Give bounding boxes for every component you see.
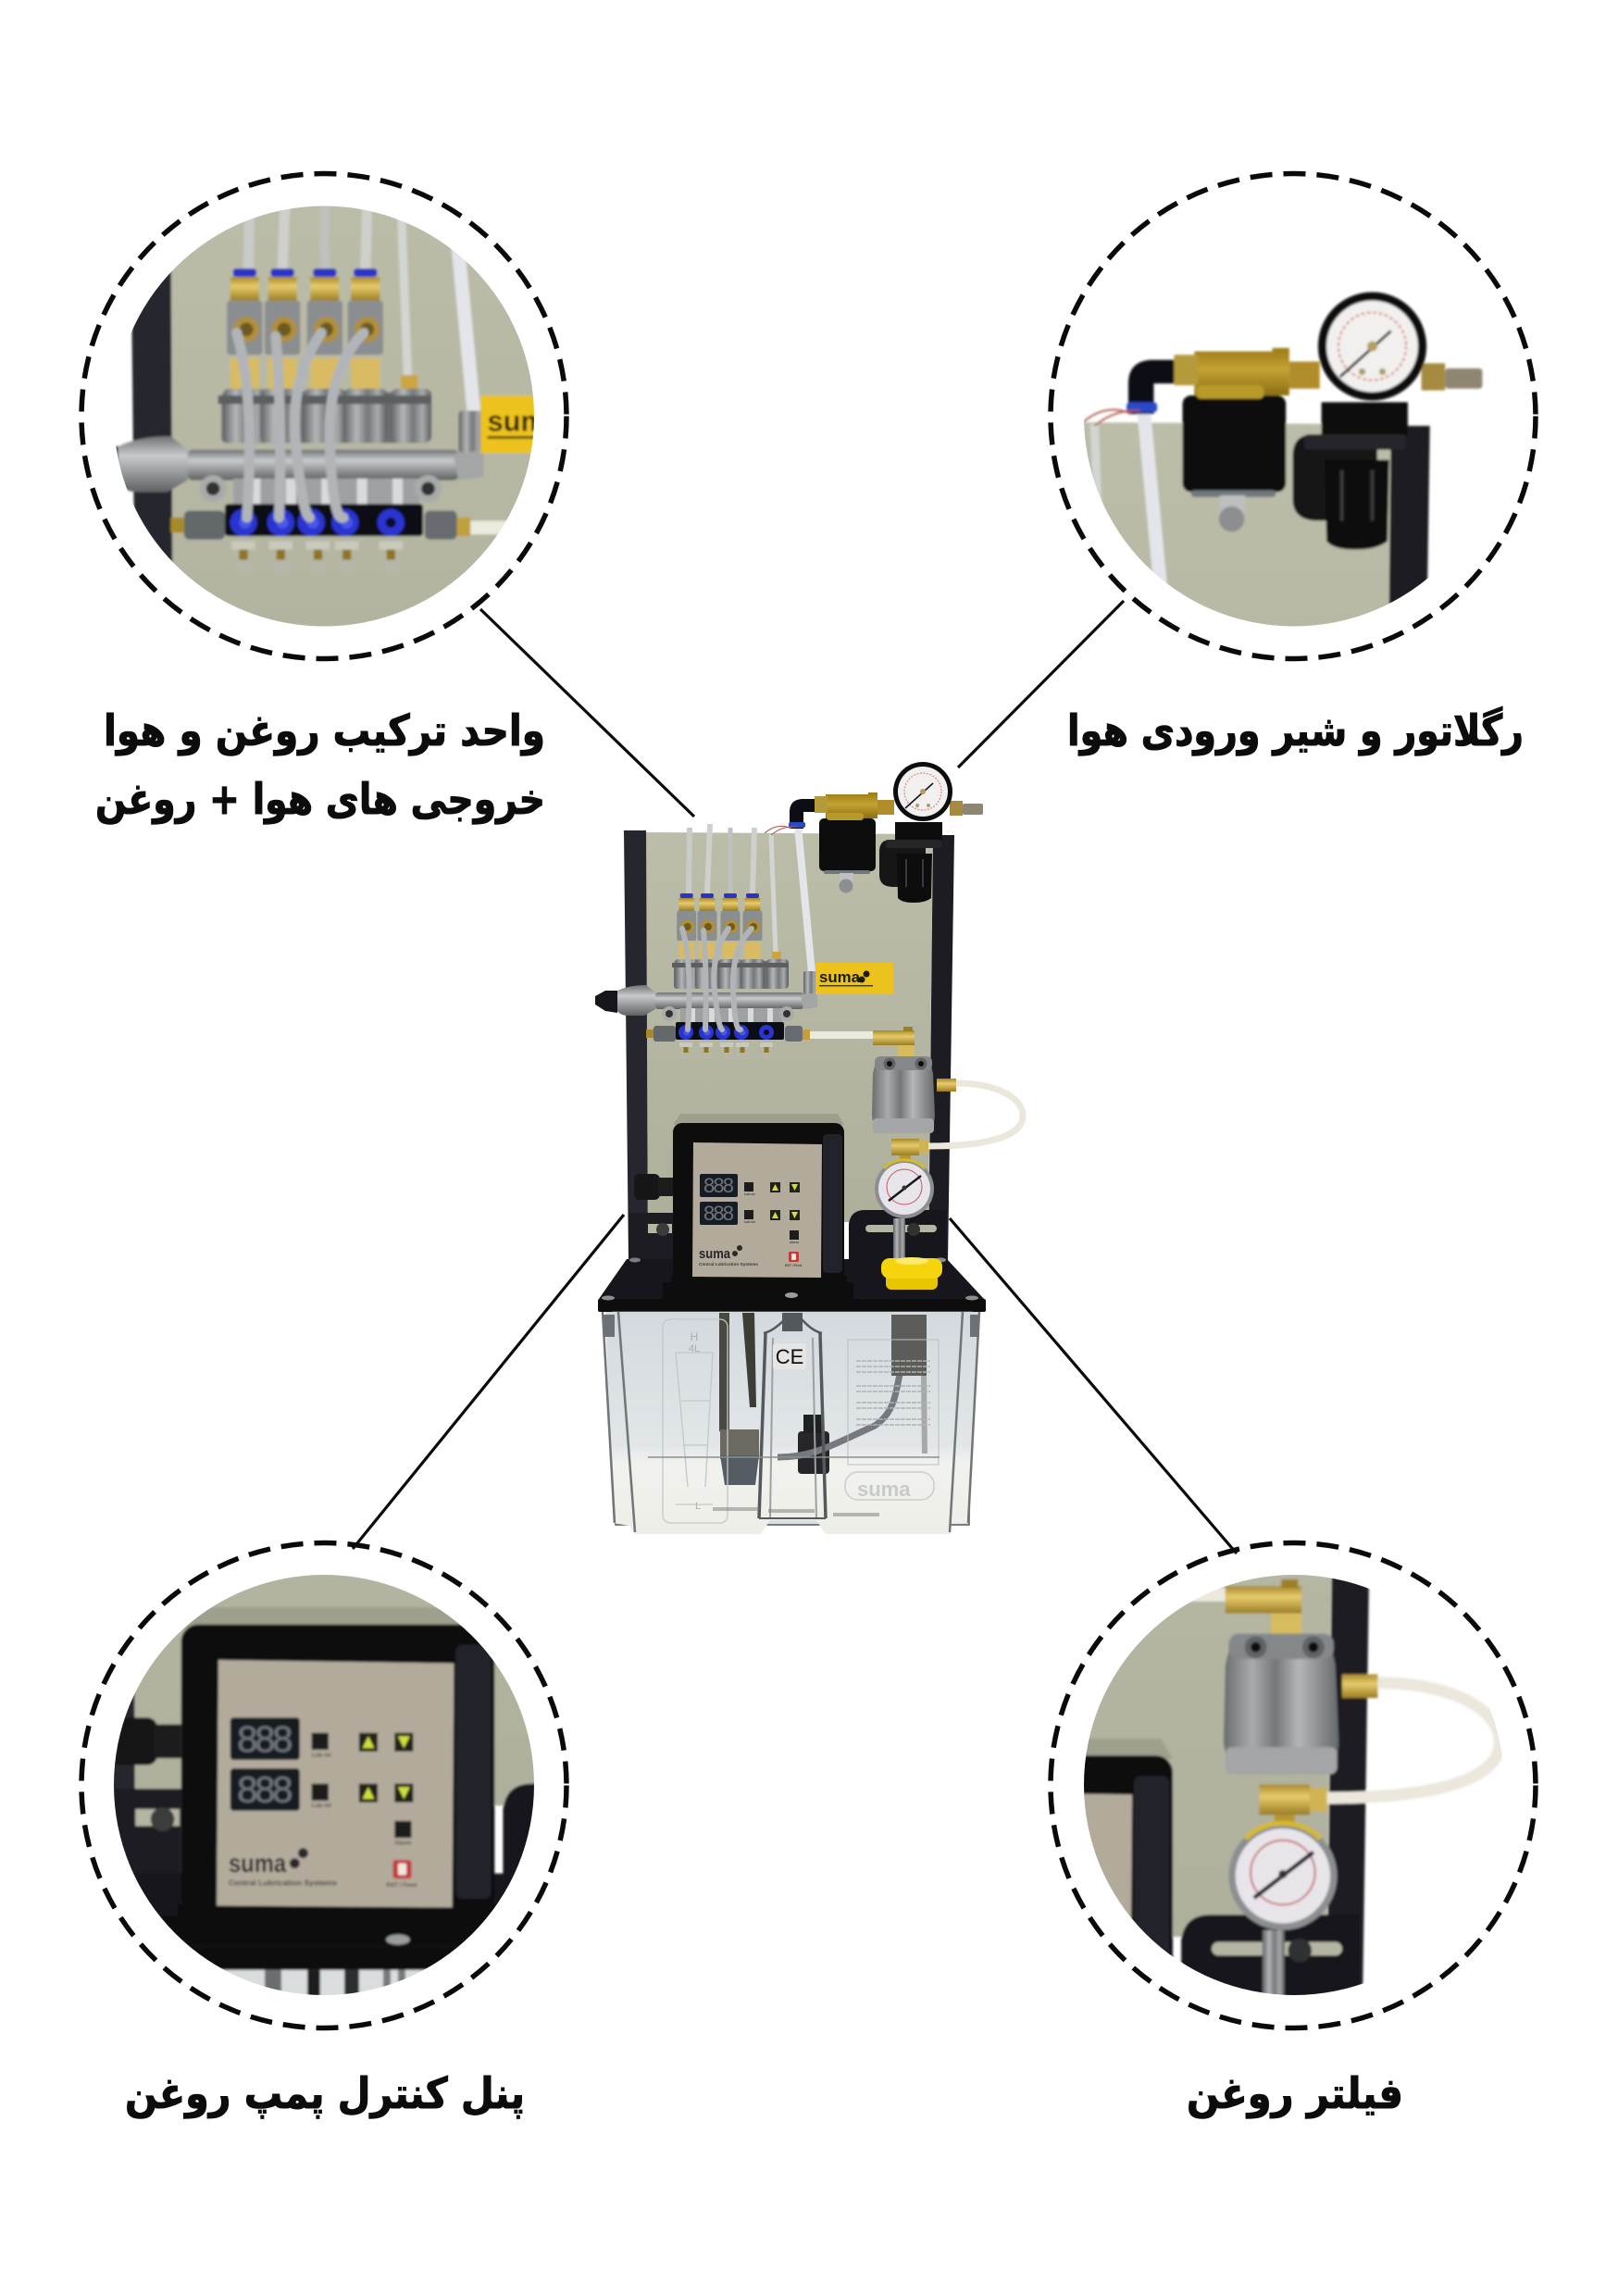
yellow suma label: [815, 963, 893, 994]
connector line: bottom-left inset to product: [353, 1215, 624, 1549]
inset: air regulator and inlet valve: [1048, 170, 1538, 661]
zoomed product crop: [1084, 291, 1485, 626]
inset: pump control panel: [79, 1541, 569, 2031]
manifold bar: [655, 992, 817, 1024]
yellow suma label: suma: [819, 968, 861, 986]
reset key: [789, 1252, 799, 1262]
embossed logo: [845, 1472, 934, 1501]
label: oil and air mixing unit: واحد ترکیب روغن و هوا: [104, 705, 545, 755]
zoomed product crop: [116, 206, 534, 626]
level scale: 4L: [689, 1343, 700, 1354]
connector line: top-right inset to product: [958, 601, 1124, 767]
bent output tubes: [682, 929, 752, 1029]
dashed ring: [1051, 1542, 1536, 2028]
mounting brackets: [629, 1210, 946, 1261]
label: oil filter: فیلتر روغن: [1187, 2068, 1403, 2118]
level scale: [663, 1319, 728, 1523]
oil inlet tube and tee: [810, 1027, 915, 1056]
supply tubes: [689, 824, 812, 972]
lower brass tee: [891, 1139, 928, 1160]
dashed ring: [81, 1542, 566, 2028]
label: pump control panel: پنل کنترل پمپ روغن: [125, 2068, 525, 2119]
inner pipes and pump: [719, 1313, 927, 1485]
panel logo: [699, 1192, 802, 1267]
air solenoid valve: [765, 792, 894, 892]
mixing valve bank: [672, 893, 817, 994]
oil filter: [872, 1056, 935, 1133]
inset: oil and air mixing unit: [79, 170, 569, 661]
panel logo: suma: [699, 1246, 731, 1262]
connector line: bottom-right inset to product: [950, 1218, 1237, 1554]
cable gland: [634, 1174, 673, 1200]
back frame and panel: [624, 830, 954, 1261]
panel logo: Central Lubrication Systems: [699, 1262, 759, 1267]
control panel face: [692, 1142, 822, 1278]
embossed logo: suma: [857, 1478, 911, 1501]
indicator squares: [744, 1182, 799, 1240]
level scale: L: [695, 1501, 701, 1512]
CE mark: CE: [776, 1345, 803, 1368]
oil pressure gauge: [875, 1159, 934, 1261]
panel logo: Lub on: [744, 1192, 755, 1196]
transparent oil reservoir: [603, 1312, 979, 1534]
panel logo: RST / Feed: [785, 1264, 802, 1267]
upper assembly: panel, fittings and control box: [595, 762, 1023, 1312]
lower distribution strip: [646, 1022, 810, 1059]
white return tube: [928, 1079, 1023, 1146]
level scale: H: [691, 1330, 698, 1343]
label: regulator and air inlet valve: رگلاتور و شیر ورودی هوا: [1067, 705, 1524, 755]
connector line: top-left inset to product: [480, 609, 694, 817]
air inlet nut and plug: [595, 985, 655, 1016]
reservoir lid: [598, 1257, 986, 1312]
digital display one: 888: [703, 1174, 734, 1197]
dashed ring: [1051, 174, 1536, 659]
label: air and oil outputs: خروجی های هوا + روغن: [95, 774, 545, 824]
yellow filler cap: [881, 1257, 942, 1290]
air pressure gauge: [893, 762, 952, 821]
dashed ring: [81, 174, 566, 659]
centre chrome channel: [759, 1319, 826, 1518]
digital display two: 888: [703, 1202, 734, 1225]
arrow keys: [770, 1182, 800, 1220]
air regulator: [879, 801, 983, 903]
central product photo: lubrication unit: [595, 762, 1023, 1534]
instruction sheet outline: [848, 1340, 939, 1465]
zoomed product crop: [1084, 1575, 1502, 1995]
zoomed product crop: [114, 1575, 534, 1995]
panel logo: Alarm: [790, 1241, 799, 1244]
panel logo: Lub int: [744, 1220, 755, 1224]
inset: oil filter: [1048, 1541, 1538, 2031]
control box housing: [663, 1114, 853, 1299]
